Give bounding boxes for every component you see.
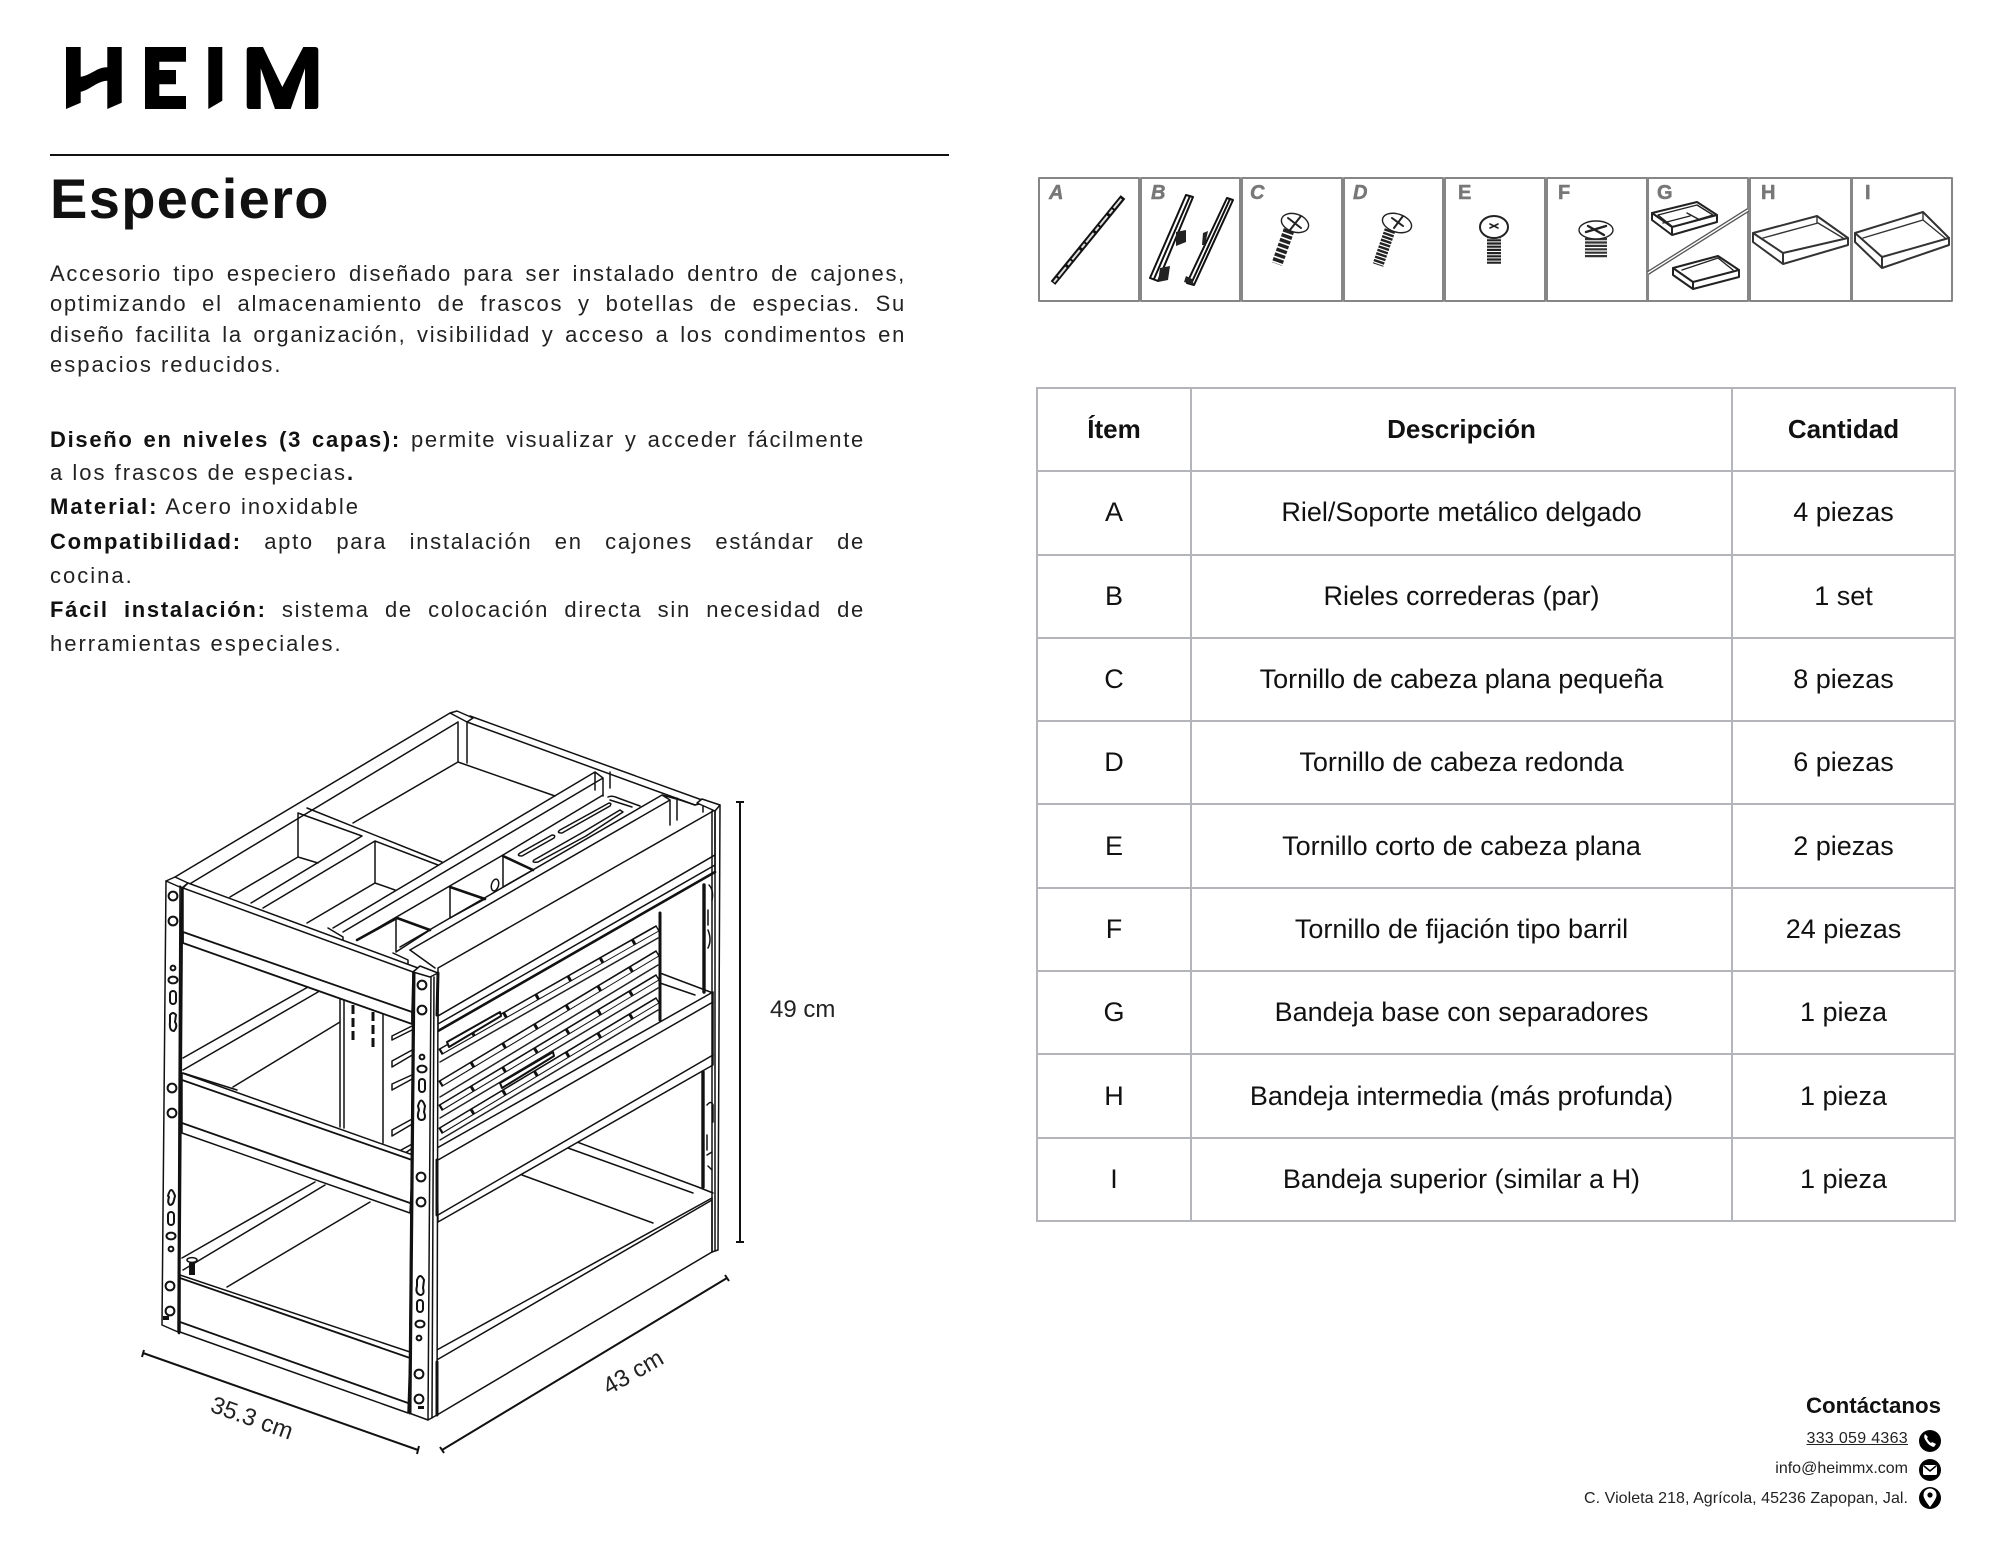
- part letters: D: [1353, 182, 1367, 204]
- parts table: 1 pieza: [1800, 1081, 1887, 1111]
- parts table: B: [1105, 581, 1123, 611]
- icon: phone: [1919, 1430, 1941, 1452]
- parts table: G: [1103, 997, 1124, 1027]
- part frames: [1039, 178, 1952, 301]
- phone: 333 059 4363: [1807, 1430, 1908, 1447]
- parts table: Bandeja superior (similar a H): [1283, 1164, 1640, 1194]
- features list: Material: Acero inoxidable: [50, 494, 360, 519]
- part letters: H: [1761, 182, 1775, 204]
- dimension: width: [142, 1350, 419, 1454]
- part letters: E: [1458, 182, 1471, 204]
- parts table: Cantidad: [1788, 414, 1899, 444]
- part letters: C: [1250, 182, 1265, 204]
- parts table: C: [1104, 664, 1124, 694]
- email: info@heimmx.com: [1775, 1460, 1908, 1477]
- parts table: Rieles correderas (par): [1323, 581, 1600, 611]
- parts table: D: [1104, 747, 1124, 777]
- parts table: Tornillo de fijación tipo barril: [1295, 914, 1628, 944]
- dimension: depth: [440, 1275, 729, 1453]
- parts table: H: [1104, 1081, 1124, 1111]
- features list: Compatibilidad: apto para instalación en cajones estándar de: [50, 529, 865, 554]
- parts strip: [1039, 178, 1952, 301]
- features list: cocina.: [50, 563, 134, 588]
- parts table: 4 piezas: [1793, 497, 1894, 527]
- part F: barrel screw: [1579, 221, 1613, 258]
- slots: [518, 803, 623, 862]
- parts table: Tornillo de cabeza plana pequeña: [1260, 664, 1663, 694]
- parts table: E: [1105, 831, 1123, 861]
- top compartments: [175, 711, 702, 888]
- part I: top tray: [1855, 212, 1949, 268]
- middle shelf beams: [182, 1073, 413, 1213]
- parts table: 24 piezas: [1786, 914, 1901, 944]
- parts table: I: [1110, 1164, 1118, 1194]
- left post: [162, 877, 188, 1333]
- parts table: Bandeja intermedia (más profunda): [1250, 1081, 1673, 1111]
- parts table: Descripción: [1387, 414, 1536, 444]
- dimension: depth: 43 cm: [598, 1344, 668, 1400]
- screw: [187, 1258, 197, 1275]
- dimension: height: 49 cm: [770, 996, 835, 1023]
- part G: base tray with dividers: [1648, 202, 1748, 289]
- icon: location pin: [1919, 1487, 1941, 1509]
- features list: herramientas especiales.: [50, 631, 343, 656]
- part letters: G: [1657, 182, 1673, 204]
- parts table: [1036, 387, 1956, 1222]
- right side rails: [440, 913, 713, 1140]
- bottom beams: [180, 1275, 410, 1413]
- icon: mail: [1919, 1459, 1941, 1481]
- title: Especiero: [50, 167, 330, 230]
- logo: HEIM: [66, 47, 318, 109]
- part A: rail: [1053, 197, 1123, 283]
- part letters: I: [1865, 182, 1871, 204]
- features list: a los frascos de especias.: [50, 460, 355, 485]
- intro paragraph: diseño facilita la organización, visibilidad y acceso a los condimentos en: [50, 322, 906, 347]
- parts table: 1 pieza: [1800, 1164, 1887, 1194]
- parts table: F: [1106, 914, 1122, 944]
- parts table: Ítem: [1087, 414, 1141, 444]
- parts table: 2 piezas: [1793, 831, 1894, 861]
- features list: [50, 427, 865, 656]
- parts table: 6 piezas: [1793, 747, 1894, 777]
- parts table: Riel/Soporte metálico delgado: [1281, 497, 1642, 527]
- part E: short screw: [1480, 216, 1508, 264]
- part B: sliding rails: [1150, 195, 1233, 285]
- back panel inside: [340, 975, 383, 1143]
- contact heading: Contáctanos: [1806, 1393, 1941, 1418]
- part letters: B: [1151, 182, 1165, 204]
- part letters: F: [1558, 182, 1570, 204]
- back right post: [697, 799, 720, 1252]
- parts table: 8 piezas: [1793, 664, 1894, 694]
- cabinet line drawing: [142, 711, 835, 1454]
- dimension: width: 35.3 cm: [207, 1391, 297, 1445]
- features list: Diseño en niveles (3 capas): permite visualizar y acceder fácilmente: [50, 427, 865, 452]
- part D: round head screw: [1378, 210, 1414, 265]
- parts table: 1 pieza: [1800, 997, 1887, 1027]
- contact block: [1584, 1393, 1941, 1507]
- top front-right beam: [438, 810, 715, 1016]
- address: C. Violeta 218, Agrícola, 45236 Zapopan, Jal.: [1584, 1490, 1908, 1507]
- intro paragraph: optimizando el almacenamiento de frascos y botellas de especias. Su: [50, 291, 906, 316]
- parts table: Tornillo corto de cabeza plana: [1282, 831, 1641, 861]
- parts table: Bandeja base con separadores: [1275, 997, 1648, 1027]
- part C: flat head screw: [1277, 210, 1311, 264]
- intro paragraph: Accesorio tipo especiero diseñado para ser instalado dentro de cajones,: [50, 261, 906, 286]
- parts table: 1 set: [1814, 581, 1873, 611]
- part letters: A: [1048, 182, 1063, 204]
- header rule: [50, 154, 949, 156]
- lower shelves, back: [182, 1182, 370, 1287]
- top front-left beam: [183, 883, 418, 1012]
- intro paragraph: espacios reducidos.: [50, 352, 282, 377]
- front corner post: [409, 966, 438, 1420]
- parts table: Tornillo de cabeza redonda: [1299, 747, 1624, 777]
- intro paragraph: [50, 261, 906, 377]
- dimension: height: [736, 802, 835, 1242]
- features list: Fácil instalación: sistema de colocación directa sin necesidad de: [50, 597, 865, 622]
- part H: intermediate tray: [1753, 216, 1848, 264]
- parts table: A: [1105, 497, 1123, 527]
- part letters: [1048, 182, 1871, 204]
